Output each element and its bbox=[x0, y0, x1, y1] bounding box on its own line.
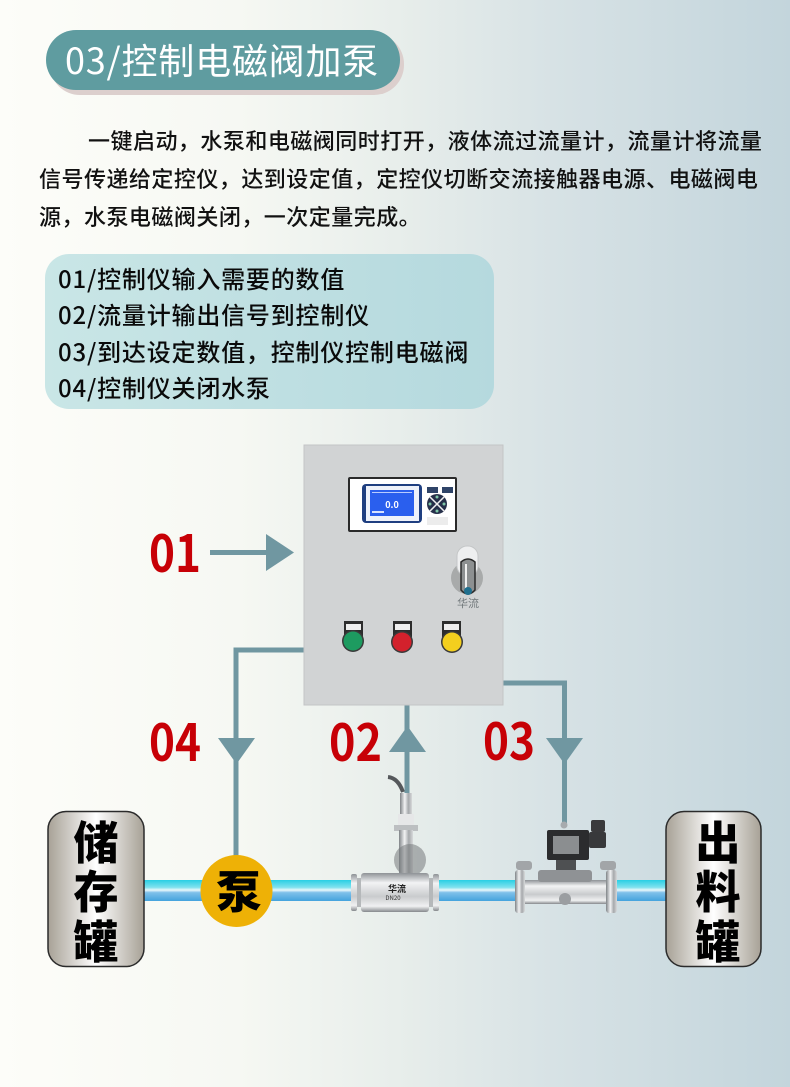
label 03: 03 bbox=[483, 701, 535, 775]
intro paragraph: 源，水泵电磁阀关闭，一次定量完成。 bbox=[39, 200, 421, 232]
start button bbox=[342, 621, 364, 652]
flow meter bbox=[351, 777, 439, 912]
label 04: 04 bbox=[149, 702, 201, 776]
output tank: 料 bbox=[695, 856, 741, 921]
intro paragraph: 信号传递给定控仪，达到设定值，定控仪切断交流接触器电源、电磁阀电 bbox=[39, 162, 758, 194]
connector: flow meter to controller bbox=[389, 705, 426, 800]
label 01: 01 bbox=[149, 513, 201, 587]
control cabinet bbox=[304, 445, 503, 705]
intro paragraph: 一键启动，水泵和电磁阀同时打开，液体流过流量计，流量计将流量 bbox=[88, 124, 762, 156]
storage tank: 存 bbox=[73, 856, 119, 921]
flow meter: 华流 bbox=[388, 882, 406, 895]
solenoid valve bbox=[515, 820, 617, 913]
pump bbox=[200, 855, 272, 927]
controller display bbox=[349, 478, 456, 531]
panel: steps list: 03/到达设定数值，控制仪控制电磁阀 bbox=[58, 333, 469, 368]
panel: steps list: 04/控制仪关闭水泵 bbox=[58, 369, 271, 404]
panel: steps list: 01/控制仪输入需要的数值 bbox=[58, 260, 345, 295]
storage tank bbox=[48, 807, 144, 971]
stop button bbox=[391, 621, 413, 653]
arrow: input to controller bbox=[210, 534, 294, 571]
reset button bbox=[441, 621, 463, 653]
panel: steps list: 02/流量计输出信号到控制仪 bbox=[58, 296, 370, 331]
connector: controller to valve bbox=[502, 683, 583, 825]
output tank: 出 bbox=[695, 807, 741, 872]
pump: 泵 bbox=[216, 856, 262, 921]
storage tank: 罐 bbox=[73, 906, 119, 971]
storage tank: 储 bbox=[73, 807, 119, 872]
controller display: 0.0 bbox=[385, 498, 399, 511]
label 02: 02 bbox=[329, 702, 382, 776]
output tank: 罐 bbox=[695, 906, 741, 971]
rotary switch: 华流 bbox=[457, 595, 479, 611]
panel: steps list bbox=[45, 254, 494, 409]
connector: controller to pump bbox=[218, 650, 304, 856]
intro paragraph bbox=[39, 124, 762, 232]
flow meter: DN20 bbox=[385, 893, 401, 902]
rotary switch bbox=[451, 546, 483, 611]
title pill: 03/控制电磁阀加泵 bbox=[65, 33, 379, 85]
pipe bbox=[144, 880, 666, 901]
output tank bbox=[666, 807, 761, 971]
